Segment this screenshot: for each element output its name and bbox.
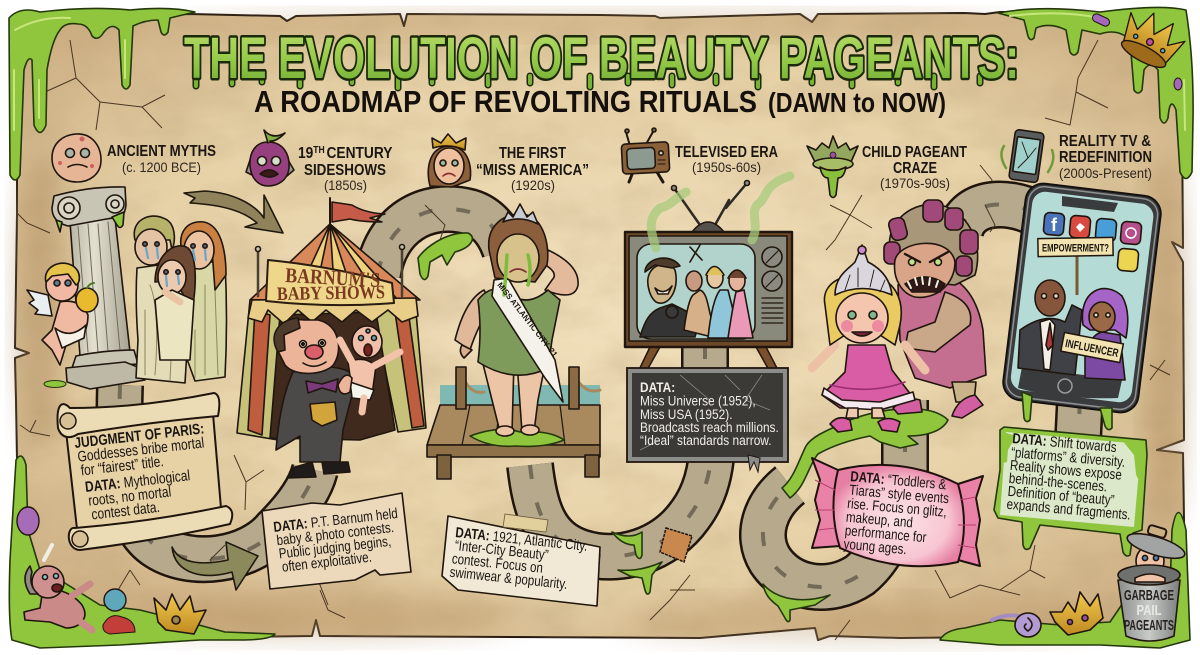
green data card: expands and fragments. bbox=[1006, 496, 1131, 523]
heading: reality tv bbox=[1059, 133, 1152, 181]
heading: first miss america: “MISS AMERICA” bbox=[476, 162, 589, 179]
heading: reality tv: (2000s-Present) bbox=[1059, 165, 1152, 181]
sign empowerment bbox=[1038, 237, 1113, 295]
candy wrapper data card bbox=[812, 458, 983, 566]
scroll: judgment of paris: JUDGMENT OF PARIS: bbox=[73, 420, 205, 451]
red blob bbox=[103, 616, 135, 634]
heading: sideshows: 19 bbox=[298, 144, 313, 162]
card: 1921 data bbox=[442, 514, 600, 606]
purple balloon bbox=[17, 507, 39, 535]
scroll: judgment of paris: DATA: Mythological bbox=[84, 467, 191, 495]
flag bbox=[330, 198, 385, 224]
pageant woman bbox=[455, 204, 578, 446]
garbage can label: GARBAGE bbox=[1124, 587, 1174, 604]
heading: televised era bbox=[675, 144, 778, 175]
curved arrow bbox=[184, 191, 283, 233]
barnum figure bbox=[274, 318, 352, 478]
heading: televised era: TELEVISED ERA bbox=[675, 144, 778, 161]
heading: sideshows: SIDESHOWS bbox=[304, 162, 386, 179]
blue ball bbox=[104, 589, 126, 611]
panel: reality tv phone bbox=[994, 182, 1163, 556]
road slime drips bbox=[612, 532, 830, 622]
heading: first miss america bbox=[476, 145, 589, 193]
card: barnum data: often exploitative. bbox=[281, 548, 373, 575]
tent bbox=[237, 224, 426, 440]
scroll: judgment of paris: contest data. bbox=[91, 499, 161, 523]
heading: child pageant craze: (1970s-90s) bbox=[880, 175, 950, 191]
pill bbox=[1091, 13, 1111, 27]
card: 1921 data: DATA: 1921, Atlantic City. bbox=[455, 524, 588, 554]
card: barnum data: baby & photo contests. bbox=[276, 519, 395, 549]
heading: child pageant craze: CRAZE bbox=[893, 160, 937, 177]
green stink bbox=[651, 176, 790, 248]
garbage can label: PAIL bbox=[1136, 602, 1162, 619]
heading: televised era: (1950s-60s) bbox=[692, 159, 761, 175]
panel: child pageant bbox=[782, 200, 986, 566]
heading: child pageant craze: CHILD PAGEANT bbox=[862, 144, 967, 161]
figures in phone bbox=[1018, 280, 1128, 380]
social icons: f bbox=[1051, 215, 1058, 235]
sign empowerment: EMPOWERMENT? bbox=[1042, 242, 1109, 254]
card: barnum data bbox=[262, 493, 411, 589]
garbage can kid bbox=[1118, 525, 1187, 641]
phone slime drips bbox=[1022, 392, 1112, 430]
scroll: judgment of paris: for “fairest” title. bbox=[80, 453, 165, 479]
candy wrapper data card: DATA: “Toddlers & bbox=[850, 468, 947, 493]
sign influencer bbox=[1061, 332, 1123, 363]
card: 1921 data: contest. Focus on bbox=[451, 550, 544, 576]
heading: reality tv: REALITY TV & bbox=[1059, 133, 1151, 150]
heading: ancient myths bbox=[107, 143, 216, 175]
candy wrapper data card: Tiaras” style events bbox=[849, 481, 950, 507]
panel: ancient myths bbox=[27, 187, 283, 389]
heading: sideshows bbox=[298, 144, 392, 193]
candy wrapper data card: rise. Focus on glitz, bbox=[847, 495, 947, 520]
cupid with golden apple bbox=[27, 263, 98, 365]
green data card: Reality shows expose bbox=[1009, 457, 1123, 483]
garbage can label bbox=[1124, 587, 1174, 634]
sash text: MISS ATLANTIC CITY '21 bbox=[495, 281, 559, 359]
goddesses bbox=[134, 216, 226, 383]
heading: child pageant craze bbox=[862, 144, 967, 191]
social icons bbox=[1043, 212, 1142, 272]
heading: sideshows: CENTURY bbox=[326, 144, 392, 162]
slime puddle bbox=[44, 380, 66, 388]
gold crown bbox=[154, 594, 206, 634]
tv data panel bbox=[627, 368, 788, 472]
subtitle: (DAWN to NOW) bbox=[768, 87, 946, 118]
slime: bottom left with baby bbox=[9, 456, 275, 648]
panel: televised era bbox=[625, 176, 792, 472]
scroll: judgment of paris bbox=[58, 393, 232, 550]
panel: sideshow tent bbox=[237, 198, 426, 478]
panel: first miss america bbox=[418, 204, 600, 479]
slime: top right corner with crown bbox=[998, 4, 1193, 178]
icon: cracked phone bbox=[1001, 129, 1053, 183]
card: 1921 data: swimwear & popularity. bbox=[449, 563, 568, 592]
scroll: judgment of paris: roots, no mortal bbox=[87, 483, 172, 509]
icon: small tv bbox=[621, 128, 670, 182]
heading: ancient myths: (c. 1200 BCE) bbox=[122, 159, 201, 175]
tv data panel: Broadcasts reach millions. bbox=[640, 419, 779, 435]
green data card: “platforms” & diversity. bbox=[1010, 444, 1126, 470]
phone bbox=[1001, 182, 1163, 414]
subtitle: A ROADMAP OF REVOLTING RITUALS bbox=[254, 84, 757, 119]
heading: first miss america: THE FIRST bbox=[499, 145, 566, 162]
discarded baby bbox=[24, 545, 92, 630]
pier bbox=[427, 367, 600, 479]
tv data panel: Miss USA (1952). bbox=[640, 406, 733, 422]
winding road bbox=[119, 204, 1080, 587]
heading: reality tv: REDEFINITION bbox=[1059, 149, 1152, 166]
icon: slimy crown bbox=[807, 136, 858, 198]
heading: sideshows: (1850s) bbox=[324, 177, 367, 193]
screaming baby bbox=[338, 326, 400, 412]
arrow: lower road bbox=[172, 542, 258, 590]
sign influencer: INFLUENCER bbox=[1064, 338, 1120, 360]
candy wrapper data card: young ages. bbox=[843, 535, 907, 557]
green data card bbox=[994, 427, 1147, 556]
banner bbox=[266, 260, 394, 305]
snail shell toy bbox=[992, 613, 1041, 637]
tv set bbox=[625, 232, 792, 347]
green data card: Definition of “beauty” bbox=[1007, 483, 1115, 508]
candy wrapper data card: makeup, and bbox=[845, 508, 914, 531]
card: barnum data: Public judging begins, bbox=[278, 533, 392, 562]
road patch bbox=[660, 528, 692, 562]
heading: ancient myths: ANCIENT MYTHS bbox=[107, 143, 216, 160]
card: barnum data: DATA: P.T. Barnum held bbox=[272, 505, 399, 535]
heading: sideshows: TH bbox=[313, 144, 325, 155]
heading: first miss america: (1920s) bbox=[511, 177, 555, 193]
banner: BARNUM'S bbox=[285, 263, 381, 292]
tv antenna bbox=[672, 180, 750, 232]
pageant mom bbox=[884, 200, 986, 418]
tv data panel: “Ideal” standards narrow. bbox=[640, 432, 772, 448]
candy wrapper data card: performance for bbox=[844, 522, 928, 546]
tv data panel: DATA: bbox=[640, 379, 675, 395]
icon: crying queen bbox=[428, 134, 471, 187]
small crown bbox=[1050, 592, 1103, 635]
slime: top left corner bbox=[9, 8, 195, 180]
slime trail bbox=[782, 409, 948, 498]
slime: bottom right with trash can bbox=[940, 512, 1190, 648]
crown bbox=[1113, 4, 1190, 75]
card: 1921 data: “Inter-City Beauty” bbox=[454, 537, 549, 563]
banner: BABY SHOWS bbox=[277, 282, 385, 305]
tv data panel: Miss Universe (1952), bbox=[640, 393, 756, 409]
icon: purple mutant face bbox=[246, 130, 294, 186]
icon: warty face bbox=[52, 134, 101, 182]
scroll: judgment of paris: Goddesses bribe mortal bbox=[77, 434, 205, 465]
slime on road bbox=[418, 233, 472, 280]
tv legs bbox=[638, 347, 778, 372]
marble column bbox=[52, 187, 145, 389]
notch bbox=[1062, 196, 1118, 212]
green data card: DATA: Shift towards bbox=[1012, 430, 1118, 455]
pageant girl bbox=[812, 245, 925, 432]
green data card: behind-the-scenes. bbox=[1008, 470, 1108, 495]
